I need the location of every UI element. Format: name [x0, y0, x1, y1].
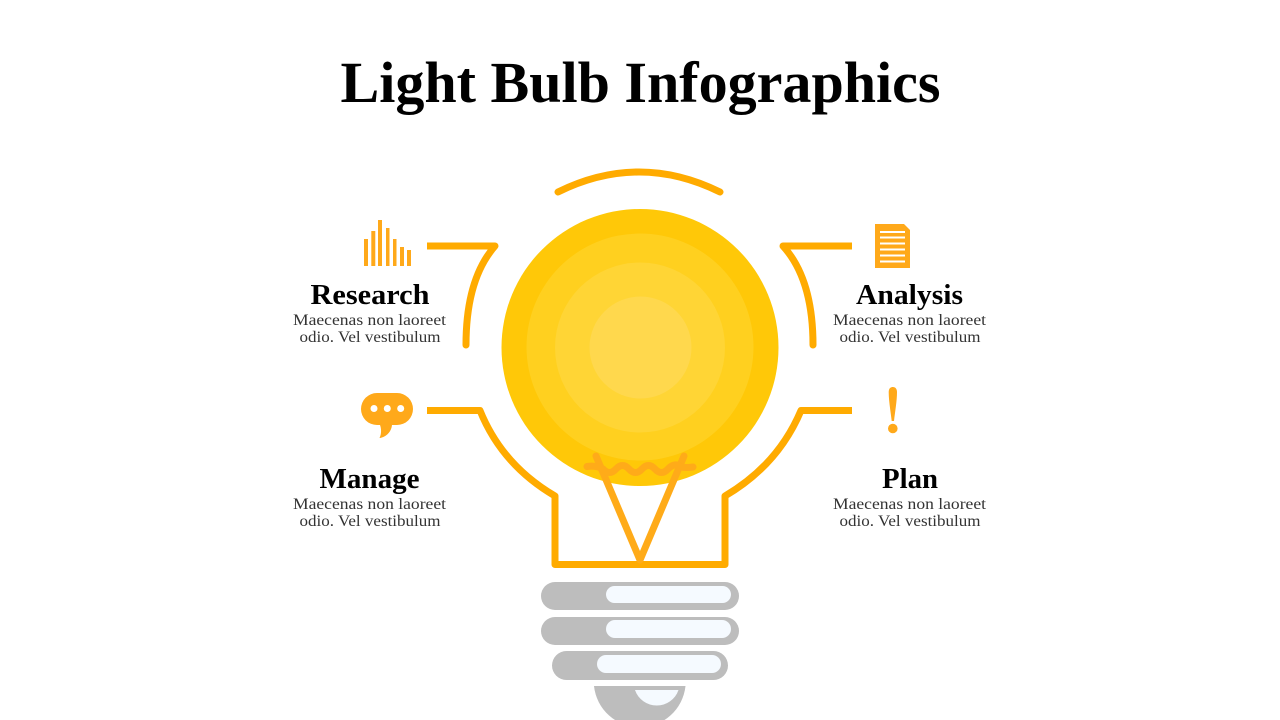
top light arc [558, 172, 720, 192]
icon: bar chart [364, 220, 411, 266]
bulb outline [427, 246, 852, 564]
title: Light Bulb Infographics [340, 50, 941, 115]
bulb base screw threads [541, 582, 739, 720]
label: Research: odio. Vel vestibulum [300, 329, 441, 346]
label: Plan [833, 463, 987, 530]
label: Research: Research [310, 279, 430, 311]
icon: speech bubble [361, 393, 413, 438]
label: Manage: odio. Vel vestibulum [300, 513, 441, 530]
label: Plan: odio. Vel vestibulum [840, 513, 981, 530]
label: Research [293, 279, 447, 346]
label: Manage: Maecenas non laoreet [293, 496, 447, 513]
icon: document [875, 224, 910, 268]
label: Manage [293, 463, 447, 530]
label: Analysis [833, 279, 987, 346]
label: Manage: Manage [320, 463, 420, 495]
icon: exclamation mark [888, 387, 898, 433]
label: Plan: Plan [882, 463, 938, 495]
label: Analysis: odio. Vel vestibulum [840, 329, 981, 346]
label: Plan: Maecenas non laoreet [833, 496, 987, 513]
bulb glass circles [502, 209, 778, 486]
filament [587, 456, 693, 560]
label: Analysis: Analysis [856, 279, 963, 311]
label: Analysis: Maecenas non laoreet [833, 312, 987, 329]
label: Research: Maecenas non laoreet [293, 312, 447, 329]
